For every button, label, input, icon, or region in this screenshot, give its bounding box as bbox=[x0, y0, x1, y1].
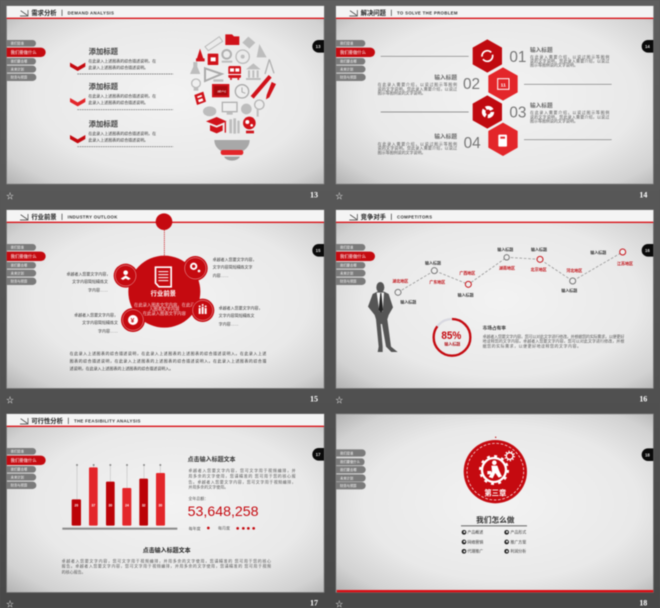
callout right bottom: 文字内容简短精炼文 bbox=[219, 312, 255, 318]
slide 15 page tab bbox=[312, 244, 324, 257]
bottom paragraph: 述说明，在此录入上述图表的上述图表的综合描述说明入。 bbox=[70, 365, 173, 371]
callout right top: 卓越者入您要文字内容， bbox=[213, 256, 257, 262]
slide 17 header: THE FEASIBILITY ANALYSIS bbox=[74, 419, 141, 424]
slide 13 footer: ☆ bbox=[6, 192, 14, 201]
regional timeline: 湖北地区 bbox=[392, 277, 408, 283]
slide 15 navigation: 未来计划 bbox=[11, 271, 25, 276]
slide 15 navigation bbox=[7, 244, 46, 285]
slide 17 header: 可行性分析 bbox=[31, 416, 64, 425]
slide 15 navigation: 我们是谁 bbox=[11, 245, 25, 250]
slide 14 page tab bbox=[642, 40, 653, 53]
market share text: 据您的实际需求，以便更好地诠释您的文字内容。 bbox=[483, 343, 581, 349]
rating legend: 每年度 bbox=[189, 525, 201, 531]
step 02 bbox=[378, 67, 612, 101]
rating legend bbox=[189, 525, 255, 531]
slide 18 page tab bbox=[642, 448, 653, 461]
bar chart: 30 bbox=[158, 504, 162, 508]
slide 18 navigation: 我们要去哪 bbox=[340, 467, 357, 472]
list item 1 bbox=[70, 47, 173, 74]
bar chart: 24 bbox=[125, 504, 129, 508]
regional timeline: 河北地区 bbox=[566, 267, 582, 273]
bottom text block: 卓越者入您要文字内容，您可文字用于视频编排，并用多余的文字使用，您请精准的 您可用于您的核心 bbox=[62, 557, 271, 563]
slide 13 header: 需求分析 bbox=[31, 8, 57, 17]
regional timeline: 输入标题 bbox=[497, 246, 513, 252]
icon: gears bbox=[183, 256, 208, 281]
slide 17 navigation: 未来计划 bbox=[11, 475, 25, 480]
slide 13 footer bbox=[6, 191, 318, 201]
list item 2: 添加标题 bbox=[89, 82, 119, 91]
list item 1: 在此录入上述图表的综合描述说明，在 bbox=[88, 58, 156, 64]
slide 17 page tab bbox=[312, 448, 324, 461]
icon: yen coin bbox=[121, 308, 145, 332]
slide 13 header: DEMAND ANALYSIS bbox=[68, 11, 114, 16]
slide 15 page tab: 15 bbox=[316, 248, 321, 253]
total amount: 53,648,258 bbox=[188, 504, 259, 520]
step 03: 图示等图例说的文字说明。 bbox=[530, 118, 578, 124]
bullet list: 产品形式 bbox=[510, 528, 526, 534]
list item 1: 添加标题 bbox=[89, 47, 119, 56]
callout left bottom: 文字内容简短精炼文 bbox=[82, 319, 118, 325]
icon: people bbox=[114, 264, 138, 288]
slide 18 footer: 18 bbox=[639, 599, 647, 608]
businessman silhouette bbox=[368, 282, 398, 352]
slide 18 bottom red bar bbox=[337, 590, 653, 592]
callout right top: 文字内容简短精炼文字 bbox=[213, 264, 253, 270]
step 01: 输入标题 bbox=[530, 46, 553, 54]
slide 16 background bbox=[336, 210, 653, 388]
section heading bbox=[461, 514, 527, 526]
bar chart bbox=[62, 464, 177, 530]
bottom text block bbox=[62, 546, 271, 574]
slide 13 navigation: 我们要去哪 bbox=[11, 59, 28, 64]
slide 13 page tab: 13 bbox=[316, 44, 321, 49]
bottom paragraph: 图表的综合描述说明，在此录入上述图表的上述图表的综合描述说明入。在此录入上述图表的综合描 bbox=[70, 357, 266, 363]
slide 14 navigation: 我们要去哪 bbox=[340, 59, 357, 64]
slide 13 navigation bbox=[7, 40, 46, 81]
list item 2: 在此录入上述图表的综合描述说明，在 bbox=[88, 92, 156, 98]
icon: yen coin: ¥ bbox=[131, 317, 135, 324]
bottom paragraph: 在此录入上述图表的综合描述说明，在此录入上述图表的上述图表的综合描述说明入。在此录入上述 bbox=[70, 350, 266, 356]
slide 15 footer bbox=[6, 395, 318, 405]
slide 16 header: 竞争对手 bbox=[361, 212, 387, 221]
85% donut: 85% bbox=[441, 330, 462, 342]
slide 16 navigation: 我们是谁 bbox=[340, 245, 354, 250]
central circle diagram: 在此录入图表文字内容，在此录 bbox=[134, 301, 195, 308]
slide 14 navigation: 我们是谁 bbox=[340, 41, 354, 46]
chapter badge bbox=[464, 437, 527, 503]
slide 14 footer: ☆ bbox=[336, 192, 344, 201]
right text block: 并用多余的文字使用。 bbox=[188, 484, 228, 490]
step 04: 04 bbox=[464, 135, 481, 152]
85% donut bbox=[434, 319, 470, 356]
slide 13 page tab bbox=[312, 40, 324, 53]
slide 16 footer: ☆ bbox=[336, 396, 344, 405]
slide 18 navigation: 财务与预算 bbox=[340, 483, 357, 488]
list item 3: 添加标题 bbox=[89, 120, 119, 129]
central circle diagram: 入图表文字内容 bbox=[149, 305, 180, 312]
slide 17 background bbox=[7, 414, 324, 592]
step 03: 输入标题 bbox=[530, 101, 553, 109]
slide 16 footer: 16 bbox=[639, 395, 647, 404]
central circle diagram bbox=[128, 213, 200, 328]
slide 14 navigation: 我们要做什么 bbox=[340, 49, 367, 56]
bullet list: 利润分析 bbox=[510, 548, 526, 554]
slide 17 page tab: 17 bbox=[316, 452, 321, 457]
central circle diagram: 在此录入图表文字内容 bbox=[143, 310, 187, 317]
slide 14: to solve the problem bbox=[336, 6, 653, 201]
slide 18 navigation: 未来计划 bbox=[340, 475, 354, 480]
regional timeline: 湖南地区 bbox=[499, 265, 515, 271]
slide 16 navigation: 我们要去哪 bbox=[340, 263, 357, 268]
bullet list: 代理推广 bbox=[467, 548, 483, 554]
market share text bbox=[483, 324, 624, 349]
slide 13 navigation: 我们是谁 bbox=[11, 41, 25, 46]
slide 16 page tab: 16 bbox=[645, 248, 650, 253]
slide 16 header bbox=[336, 210, 653, 223]
slide 17 navigation: 我们是谁 bbox=[11, 449, 25, 454]
step 04 bbox=[378, 123, 612, 156]
step 04: 输入标题 bbox=[434, 133, 457, 141]
slide 17 footer bbox=[6, 599, 318, 608]
slide 18 footer bbox=[336, 599, 647, 608]
slide 14 header: TO SOLVE THE PROBLEM bbox=[397, 11, 458, 16]
list item 2: 此录入上述图表的综合描述说明。 bbox=[88, 99, 148, 105]
slide 18 page tab: 18 bbox=[645, 452, 650, 457]
right text block bbox=[188, 456, 296, 490]
regional timeline: 输入标题 bbox=[590, 249, 606, 255]
bottom paragraph bbox=[70, 350, 266, 371]
slide 16 navigation bbox=[336, 244, 375, 285]
right text block: 卓越者入您要文字内容，您可文字用于视频编排，并 bbox=[188, 467, 296, 473]
regional timeline: 输入标题 bbox=[458, 291, 474, 297]
step 04: 在此录入需要介绍，以说过图示等图例 bbox=[378, 140, 457, 146]
bar chart: 37 bbox=[91, 504, 95, 508]
slide 17 navigation: 我们要去哪 bbox=[11, 467, 28, 472]
callout right bottom: 卓越者入您要文字内容， bbox=[219, 304, 263, 310]
slide 14 footer bbox=[336, 191, 647, 201]
callout left bottom: 字内容…… bbox=[98, 328, 118, 334]
total amount bbox=[188, 495, 259, 520]
bottom text block: 点击输入标题文本 bbox=[143, 546, 191, 554]
slide 13: demand analysis bbox=[6, 6, 324, 201]
slide 16 page tab bbox=[642, 244, 653, 257]
list item 3: 在此录入上述图表的综合描述说明，在 bbox=[88, 130, 156, 136]
slide 17 navigation bbox=[7, 448, 46, 489]
slide 18 background bbox=[336, 414, 653, 592]
list item 3: 此录入上述图表的综合描述说明。 bbox=[88, 137, 148, 143]
slide 15 header: 行业前景 bbox=[31, 212, 57, 221]
callout left top: 卓越者入您要文字内容， bbox=[66, 270, 110, 276]
rating legend: 每月度 bbox=[218, 525, 230, 531]
regional timeline: 江苏地区 bbox=[617, 260, 633, 266]
callout right bottom: 字内容…… bbox=[219, 320, 239, 326]
slide 14 page tab: 14 bbox=[645, 44, 650, 49]
bullet list: 网络营销 bbox=[467, 538, 483, 544]
slide 17 footer: 17 bbox=[310, 599, 318, 608]
slide 16 footer bbox=[336, 395, 647, 405]
slide 15 navigation: 财务与预算 bbox=[11, 279, 28, 284]
regional timeline: 北京地区 bbox=[531, 266, 547, 272]
callout left top: 字内容…… bbox=[88, 286, 108, 292]
step 04: 说的文字说明。您此录入需要介绍，以说过 bbox=[378, 145, 457, 151]
right text block: 用多余的文字使用，您请精准的 您可用于您的核心报 bbox=[188, 472, 296, 478]
slide 15 background bbox=[7, 210, 324, 388]
callout right top bbox=[213, 256, 257, 278]
slide 13 navigation: 未来计划 bbox=[11, 67, 25, 72]
callout left top bbox=[66, 270, 110, 292]
slide 15 navigation: 我们要做什么 bbox=[11, 253, 37, 260]
regional timeline: 输入标题 bbox=[561, 287, 577, 293]
85% donut: 输入标题 bbox=[444, 341, 460, 347]
slide 16: competitors bbox=[336, 210, 653, 405]
list item 3 bbox=[70, 120, 173, 147]
regional timeline: 输入标题 bbox=[425, 259, 441, 265]
right text block: 告。卓越者入您要文字内容，您可文字用于视频编排， bbox=[188, 478, 296, 484]
regional timeline: 输入标题 bbox=[400, 299, 416, 305]
bullet list bbox=[462, 528, 526, 554]
step 02: 02 bbox=[463, 76, 480, 93]
slide 18: chapter three bbox=[336, 414, 653, 608]
slide 15 header: INDUSTRY OUTLOOK bbox=[68, 215, 118, 220]
slide 16 header: COMPETITORS bbox=[397, 215, 432, 220]
list item 2 bbox=[70, 82, 173, 110]
bottom text block: 的核心报告。 bbox=[62, 568, 86, 574]
list item 1: 此录入上述图表的综合描述说明。 bbox=[88, 64, 148, 70]
regional timeline bbox=[392, 246, 633, 305]
bullet list: 产品概述 bbox=[467, 528, 483, 534]
light bulb made of education icons: ab+c bbox=[217, 88, 226, 93]
slide 15 footer: ☆ bbox=[6, 396, 14, 405]
bar chart: 30 bbox=[108, 504, 112, 508]
step 01: 01 bbox=[509, 49, 526, 66]
slide 13 navigation: 财务与预算 bbox=[11, 75, 28, 80]
bullet list: 推广方案 bbox=[510, 538, 526, 544]
step 03: 说的文字说明。您此录入需要介绍，以说过 bbox=[530, 113, 609, 119]
bottom text block: 报告。卓越者入您要文字内容，您可文字用于视频编排，并用多余的文字使用，您请精准的 您可用于视频 bbox=[62, 562, 271, 568]
slide 16 navigation: 我们要做什么 bbox=[340, 253, 367, 260]
step 01 bbox=[381, 39, 609, 73]
market share text: 地诠释您的文字内容。卓越者入您要文字内容，您可以对此文字进行修改，并根 bbox=[483, 337, 624, 343]
callout right bottom bbox=[219, 304, 263, 326]
slide 13 navigation: 我们要做什么 bbox=[11, 49, 37, 56]
slide 13 background bbox=[7, 6, 324, 184]
right text block: 点击输入标题文本 bbox=[188, 456, 236, 464]
section heading: 我们怎么做 bbox=[476, 514, 515, 524]
step 02: 在此录入需要介绍，以说过图示等图例 bbox=[378, 81, 457, 87]
slide 16 navigation: 财务与预算 bbox=[340, 279, 357, 284]
bar chart: 20 bbox=[74, 504, 78, 508]
callout left bottom: 卓越者入您要文字内容， bbox=[74, 311, 118, 317]
chapter badge: 第三章 bbox=[484, 488, 506, 497]
regional timeline: 广西地区 bbox=[459, 270, 475, 276]
icon: team bbox=[191, 299, 214, 322]
slide 13 header bbox=[7, 6, 324, 19]
slide 15 header bbox=[7, 210, 324, 223]
slide 14 navigation bbox=[336, 40, 375, 81]
bar chart: 32 bbox=[142, 504, 146, 508]
slide 15: industry outlook bbox=[6, 210, 324, 405]
total amount: 全年总额： bbox=[188, 495, 208, 501]
slide 18 navigation: 我们是谁 bbox=[340, 450, 354, 455]
step 01: 说的文字说明。您此录入需要介绍，以说过 bbox=[530, 57, 609, 63]
slide 17 navigation: 我们要做什么 bbox=[11, 457, 37, 464]
step 01: 在此录入需要介绍，以说过图示等图例 bbox=[530, 53, 609, 59]
slide 18 navigation bbox=[336, 449, 366, 489]
regional timeline: 广东地区 bbox=[429, 278, 445, 284]
slide 14 navigation: 财务与预算 bbox=[340, 75, 357, 80]
step 03: 在此录入需要介绍，以说过图示等图例 bbox=[530, 109, 609, 115]
step 01: 图示等图例说的文字说明。 bbox=[530, 62, 578, 68]
step 02: 图示等图例说的文字说明。 bbox=[378, 90, 425, 96]
slide 14 header: 解决问题 bbox=[361, 8, 387, 17]
slide 15 navigation: 我们要去哪 bbox=[11, 263, 28, 268]
slide 14 footer: 14 bbox=[639, 191, 647, 200]
light bulb made of education icons bbox=[190, 34, 276, 161]
slide 17: the feasibility analysis bbox=[6, 414, 324, 608]
step 03: 03 bbox=[509, 104, 526, 121]
callout left top: 文字内容简短精炼文 bbox=[72, 278, 108, 284]
callout left bottom bbox=[74, 311, 118, 334]
slide 16 navigation: 未来计划 bbox=[340, 271, 354, 276]
slide 14 navigation: 未来计划 bbox=[340, 67, 354, 72]
step 03 bbox=[381, 95, 609, 129]
step 02: 11 bbox=[501, 83, 506, 89]
slide 14 header bbox=[336, 6, 653, 19]
central circle diagram: 行业前景 bbox=[151, 289, 176, 298]
step 02: 输入标题 bbox=[434, 73, 457, 81]
market share text: 市场占有率 bbox=[483, 324, 506, 331]
slide 15 footer: 15 bbox=[310, 395, 318, 404]
callout right top: 内容…… bbox=[213, 272, 229, 278]
slide 14 background bbox=[336, 6, 653, 184]
slide 17 navigation: 财务与预算 bbox=[11, 483, 28, 488]
slide 18 navigation: 我们要做什么 bbox=[340, 459, 361, 464]
step 04: 图示等图例说的文字说明。 bbox=[378, 149, 425, 155]
regional timeline: 输入标题 bbox=[531, 246, 547, 252]
market share text: 卓越者入您要文字内容，您可以对此文字进行修改，并根据您的实际需求，以便更好 bbox=[483, 333, 624, 339]
slide 17 header bbox=[7, 414, 324, 427]
step 02: 说的文字说明。您此录入需要介绍，以说过 bbox=[378, 85, 457, 91]
slide 13 footer: 13 bbox=[310, 191, 318, 200]
